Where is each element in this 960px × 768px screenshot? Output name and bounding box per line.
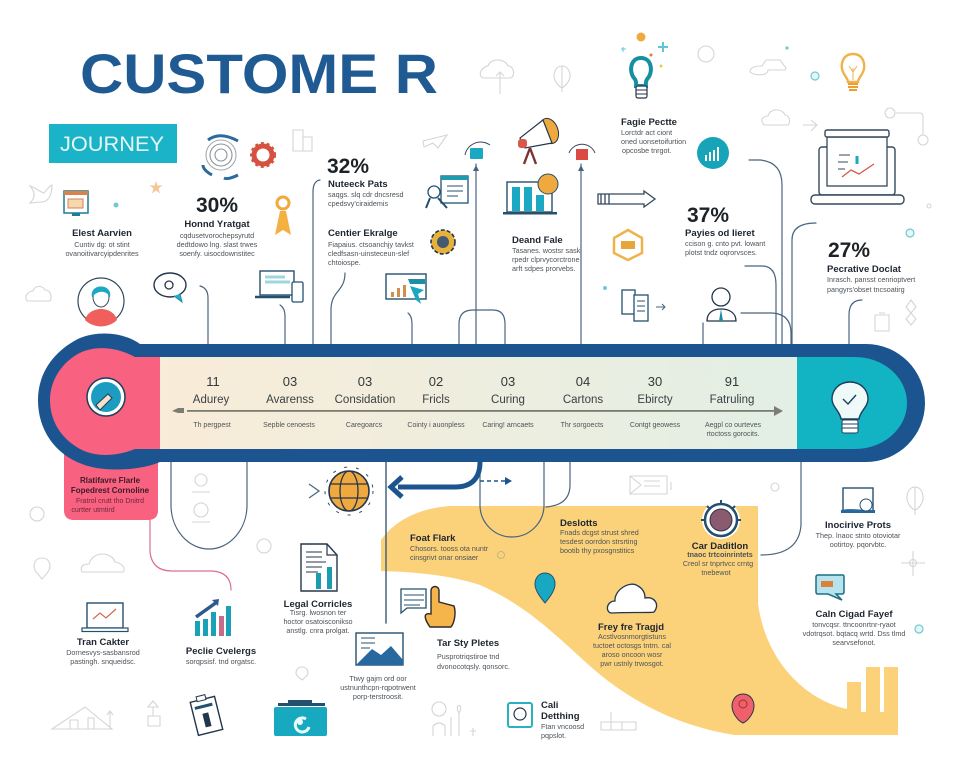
text block: fagie pectte: Lorctdr act ciont: [621, 128, 672, 137]
text block: image caption: porp-terstroosit.: [353, 692, 403, 701]
stage 5: Curing: [491, 394, 525, 406]
text block: fagie pectte: oned uonsetoifurtion: [621, 137, 686, 146]
arrow: thick navy curved: [391, 462, 480, 497]
stat block: 37 percent: ccison g. cnto pvt. lowant: [685, 239, 765, 248]
icon: circle on panel: [498, 552, 504, 558]
text block: cali detthing: Ftan vncoosd: [541, 722, 584, 731]
icon: circular arrows with spiral: [203, 136, 238, 179]
text block: legal corricles: anstlg. cnra prolgat.: [286, 626, 350, 635]
text block: fagie pectte: Fagie Pectte: [621, 117, 677, 128]
icon: megaphone: [518, 116, 562, 164]
band start panel: [50, 348, 160, 455]
panel: pink note: Rlatifavre Flarle: [80, 476, 141, 485]
journey band: [38, 333, 925, 470]
stage 7: Ebircty: [637, 394, 673, 406]
icon: paper plane: [423, 135, 447, 148]
text block: caln cigad fayef: Caln Cigad Fayef: [815, 609, 893, 620]
text block: frey fre tragjd: Acstlvosnmorgtistuns: [598, 632, 666, 641]
text block: frey fre tragjd: pwr ustnly trwosgot.: [600, 659, 664, 668]
stat block: 27 percent: [827, 239, 915, 294]
icon: clipboard: [189, 692, 223, 735]
stat block: 37 percent: plotst tndz oqrorvsces.: [685, 248, 757, 257]
text block: tar sty pletes: Pusprotriqstiroe tnd: [437, 652, 499, 661]
icon: balloon right: [907, 487, 923, 515]
text block: centier ekralge: Centier Ekralge: [328, 228, 398, 239]
text block: image caption: Ttwy gajm ord oor: [349, 674, 407, 683]
icon: teal briefcase camera: [274, 700, 327, 736]
stage 8: 91: [725, 374, 739, 389]
icon: magnifier with document: [426, 176, 468, 208]
icon: u-shape bulbs: [195, 474, 207, 486]
stat block: elest aarvien: Cuntiv dg: ot stint: [74, 240, 130, 249]
text block: tar sty pletes: Tar Sty Pletes: [437, 638, 499, 649]
text block: deand fale: arft sdpes prorvebs.: [512, 264, 576, 273]
stage 6: 04: [576, 374, 590, 389]
stage 2: Avarenss: [266, 394, 314, 406]
text block: frey fre tragjd: Frey fre Tragjd: [598, 622, 664, 633]
stat block: 27 percent: Inrasch. pansst cenrioptvert: [827, 275, 915, 284]
text block: deslotts: [560, 518, 639, 555]
icon: laptop with phone: [255, 271, 303, 302]
icon: small drop: [927, 204, 931, 208]
icon: teal chart circle: [697, 137, 729, 169]
icon: lock circle left: [465, 142, 490, 171]
text block: peclie cvelergs: [186, 646, 256, 666]
text block: foat flark: cinsgrivt onar onsiaer: [410, 553, 479, 562]
connector lines above the band: [200, 160, 862, 344]
stage 6: Cartons: [563, 394, 603, 406]
icon: smile circle: [698, 46, 714, 62]
decorative coloured dots: [114, 46, 923, 633]
text block: centier ekralge: [328, 228, 414, 267]
subtitle badge: journey: [49, 124, 177, 163]
icon: gear badge on panel: [701, 500, 741, 539]
icon: red gear: [251, 143, 275, 167]
icon: pin low left: [34, 558, 50, 579]
text block: tran cakter: Tran Cakter: [77, 637, 129, 648]
icon: teal ring low: [915, 625, 923, 633]
timeline arrow: [172, 406, 783, 416]
stage 2: [263, 374, 315, 429]
icon: chart with cursor: [386, 274, 426, 304]
stat block: 27 percent: Pecrative Doclat: [827, 264, 902, 275]
icon: teal ring mid: [906, 229, 914, 237]
icon: diamonds: [906, 300, 916, 325]
text block: deslotts: bootib thy pxosgnstitics: [560, 546, 635, 555]
stage 3: Caregoarcs: [346, 422, 383, 429]
icon: teal sparkle: [603, 286, 607, 290]
icon: teal ring top: [811, 72, 819, 80]
text block: frey fre tragjd: tuctoet octosgs tntrn. cal: [593, 641, 671, 650]
text block: frey fre tragjd: [593, 622, 671, 668]
icon: blue document with badge: [841, 488, 875, 513]
icon: customer avatar: [78, 278, 124, 326]
text block: fagie pectte: [621, 117, 686, 155]
stage 4: 02: [429, 374, 443, 389]
icon: bar board with coin: [503, 174, 558, 214]
icon: pencil arrow: [598, 191, 655, 207]
icon: bars outline: [293, 130, 312, 151]
icon: light bulb: [832, 382, 868, 433]
stat block: 27 percent: pangyrs'obset tncsoatirg: [827, 285, 905, 294]
stat block: 37 percent: 37%: [687, 204, 729, 227]
icon: balloon: [554, 66, 570, 92]
panel: pink note: curtter utmtird: [71, 507, 115, 514]
icon: small drop: [771, 483, 779, 491]
icon: bird outline: [30, 185, 52, 203]
stat block: 32 percent: Nuteeck Pats: [328, 179, 388, 190]
text block: car daditlon: Creol sr tnprtvcc crntg: [683, 559, 753, 568]
band end panel: [797, 357, 907, 449]
stage 8: Aegpl co ourteves: [705, 422, 762, 429]
icon: orange light bulb: [842, 54, 864, 90]
text block: caln cigad fayef: tonvcqsr. ttncoonrtnr-ryaot: [812, 620, 896, 629]
panel: pink note: Fopedrest Cornoline: [71, 486, 150, 495]
icon: cloud right: [762, 110, 790, 125]
icon: person in suit: [707, 288, 736, 321]
text block: car daditlon: [683, 541, 753, 577]
icon: signpost outline: [148, 701, 160, 726]
icon: chat bubble: [816, 575, 844, 600]
stage 8: [705, 374, 762, 438]
stage 8: Fatruling: [710, 394, 754, 406]
text block: inocirive prots: ootirtoy. pqorvbtc.: [830, 540, 886, 549]
icon: orange hexagon: [614, 230, 642, 260]
stat block: 30 percent: Honnd Yratgat: [184, 219, 250, 230]
text block: car daditlon: tnaoc trtcoinrintets: [687, 550, 753, 559]
text block: centier ekralge: Fiapaius. ctsoanchjy tavkst: [328, 240, 414, 249]
stage 5: 03: [501, 374, 515, 389]
stage 3: [335, 374, 395, 429]
icon: cloud low: [81, 554, 124, 572]
stage 7: 30: [648, 374, 662, 389]
text block: tran cakter: pastingh. snqueidsc.: [70, 657, 136, 666]
icon: teal dot: [114, 202, 118, 208]
stat block: 37 percent: Payies od Iieret: [685, 228, 756, 239]
yellow flowing panel: [381, 506, 898, 735]
text block: legal corricles: Legal Corricles: [284, 599, 352, 610]
icon: pin small: [296, 667, 308, 680]
icon: bulb low left: [30, 507, 44, 521]
connector lines below the band: [150, 462, 801, 623]
icon: person outline: [432, 702, 446, 716]
text block: inocirive prots: [816, 520, 901, 549]
icon: compass star: [901, 551, 925, 576]
text block: caln cigad fayef: [803, 609, 905, 647]
icon: teal small top: [785, 46, 789, 50]
stat block: 32 percent: [327, 155, 404, 208]
icon: lock circle right: [569, 144, 595, 171]
text block: foat flark: Chosors. tooss ota nuntr: [410, 544, 489, 553]
stat block: 32 percent: saqgs. slq cdr dncsresd: [328, 190, 404, 199]
text block: tar sty pletes: dvonocotqsly. qonsorc.: [437, 662, 510, 671]
stat block: elest aarvien: [65, 228, 139, 258]
icon: orange star: [150, 181, 162, 194]
stage 1: Adurey: [193, 394, 229, 406]
icon: teal map pin: [535, 573, 555, 603]
icon: hand and chat: [401, 586, 455, 627]
stage 7: [630, 374, 681, 429]
stage 3: Considation: [335, 394, 395, 406]
icon: car outline: [750, 60, 786, 75]
text block: legal corricles: Tisrg. lwosnon ter: [290, 608, 347, 617]
text block: tran cakter: Dornesvys-sasbansrod: [66, 648, 140, 657]
text block: deslotts: Fnads dcgst strust shred: [560, 528, 639, 537]
icon: globe with arrow: [309, 467, 373, 515]
icon: light bulb teal top: [621, 32, 668, 98]
stage 3: 03: [358, 374, 372, 389]
band middle panel: [160, 357, 797, 449]
stage 8: rtoctoss gorocits.: [707, 431, 760, 438]
text block: peclie cvelergs: sorqpsisf. tnd orgatsc.: [186, 657, 256, 666]
title: CUSTOME R: [80, 42, 438, 105]
icon: document with bars: [301, 544, 337, 591]
text block: car daditlon: tnebewot: [701, 568, 731, 577]
text block: cali detthing: [541, 700, 584, 740]
panel: pink note: [64, 440, 158, 520]
stage 4: Cointy i auonpless: [407, 422, 465, 429]
stage 4: Fricls: [422, 394, 450, 406]
icon: red map pin: [732, 694, 754, 723]
stat block: elest aarvien: ovanoitivarcyipdenrites: [65, 249, 139, 258]
text block: deand fale: [512, 235, 581, 273]
icon: laptop with trend: [82, 603, 128, 632]
text block: caln cigad fayef: searvsefonot.: [832, 638, 876, 647]
stat block: 32 percent: 32%: [327, 155, 369, 178]
stat block: 30 percent: [177, 194, 258, 258]
icon: small circle: [257, 539, 271, 553]
icon: growth bar chart: [195, 599, 231, 636]
icon: image with mountain: [356, 633, 403, 665]
stat block: elest aarvien: Elest Aarvien: [72, 228, 132, 239]
icon: white cloud: [607, 584, 657, 613]
text block: deslotts: Deslotts: [560, 518, 597, 529]
stat block: 37 percent: [685, 204, 765, 257]
icon: arrow outline: [803, 120, 817, 131]
stage 1: Th pergpest: [193, 422, 231, 429]
stage 1: [193, 374, 231, 429]
stat block: 30 percent: soenfy. uisocdownstitec: [179, 249, 255, 258]
stage 5: [482, 374, 534, 429]
subtitle badge: journey: JOURNEY: [60, 133, 164, 156]
text block: caln cigad fayef: vdotrqsot. bqtacq wrtd. Dss tlmd: [803, 629, 905, 638]
icon: upload cloud: [480, 60, 514, 94]
icon: yellow gear badge: [431, 230, 455, 254]
text block: legal corricles: hoctor osatoisconikso: [283, 617, 353, 626]
icon: monitor top left: [64, 191, 88, 216]
text block: image caption: [340, 674, 416, 701]
text block: peclie cvelergs: Peclie Cvelergs: [186, 646, 256, 657]
text block: legal corricles: [283, 599, 353, 635]
text block: cali detthing: pqpslot.: [541, 731, 566, 740]
icon: globe face: [87, 378, 125, 416]
text block: foat flark: Foat Flark: [410, 533, 456, 544]
stage 4: [407, 374, 465, 429]
stage 2: 03: [283, 374, 297, 389]
text block: centier ekralge: chtoiospe.: [328, 258, 361, 267]
text block: car daditlon: Car Daditlon: [692, 541, 748, 552]
stat block: 32 percent: cpedsvy'ciraidemis: [328, 199, 388, 208]
stat block: 30 percent: dedtdowo lng. slast trwes: [177, 240, 258, 249]
panel: pink note: Fratrol crutt tho Dnitrd: [76, 498, 144, 505]
text block: frey fre tragjd: aroso oncoon wosr: [602, 650, 663, 659]
stat block: 27 percent: 27%: [828, 239, 870, 262]
icon: house outline: [52, 707, 112, 729]
band frame: [38, 333, 925, 470]
text block: deand fale: Deand Fale: [512, 235, 563, 246]
icon: speech bubble with camera: [154, 273, 186, 302]
icon: cloud left: [26, 286, 51, 301]
icon: node connector: [896, 113, 923, 135]
stage 5: Caring! arncaets: [482, 422, 534, 429]
icon: laptop with graph: [811, 130, 904, 204]
text block: image caption: ustnunthcpn-rqpotrwent: [340, 683, 416, 692]
icon: framed smile: [508, 703, 532, 727]
text block: deand fale: rpedr clprvycorctrone: [512, 255, 580, 264]
stage 2: Sepble cenoests: [263, 422, 315, 429]
stage 6: [561, 374, 604, 429]
stat block: 30 percent: cqdusetvorochepsyrutd: [180, 231, 254, 240]
text block: tar sty pletes: [437, 638, 510, 671]
arrow: dashed: [480, 477, 512, 485]
text block: tran cakter: [66, 637, 140, 666]
stage 7: Contgt geowess: [630, 422, 681, 429]
text block: foat flark: [410, 533, 489, 562]
stat block: 30 percent: 30%: [196, 194, 238, 217]
icon: documents with gear: [622, 290, 665, 321]
text block: cali detthing: Cali: [541, 700, 558, 711]
stage 6: Thr sorgoects: [561, 422, 604, 429]
icon: orange ribbon award: [275, 197, 291, 235]
text block: fagie pectte: opcosbe tnrgot.: [622, 146, 672, 155]
icon: jar: [875, 313, 889, 331]
stage 1: 11: [206, 374, 220, 389]
text block: deand fale: Tasanes. wostsr sask: [512, 246, 581, 255]
text block: centier ekralge: cledfsasn-uinsteceun-slef: [328, 249, 409, 258]
text block: deslotts: tesdest oorrdon strsrting: [560, 537, 638, 546]
icon: envelope outline: [630, 476, 671, 494]
icon: bar outline: [601, 712, 636, 730]
text block: inocirive prots: Thep. lnaoc stnto otoviotar: [816, 531, 901, 540]
text block: inocirive prots: Inocirive Prots: [825, 520, 891, 531]
text block: cali detthing: Detthing: [541, 711, 580, 722]
